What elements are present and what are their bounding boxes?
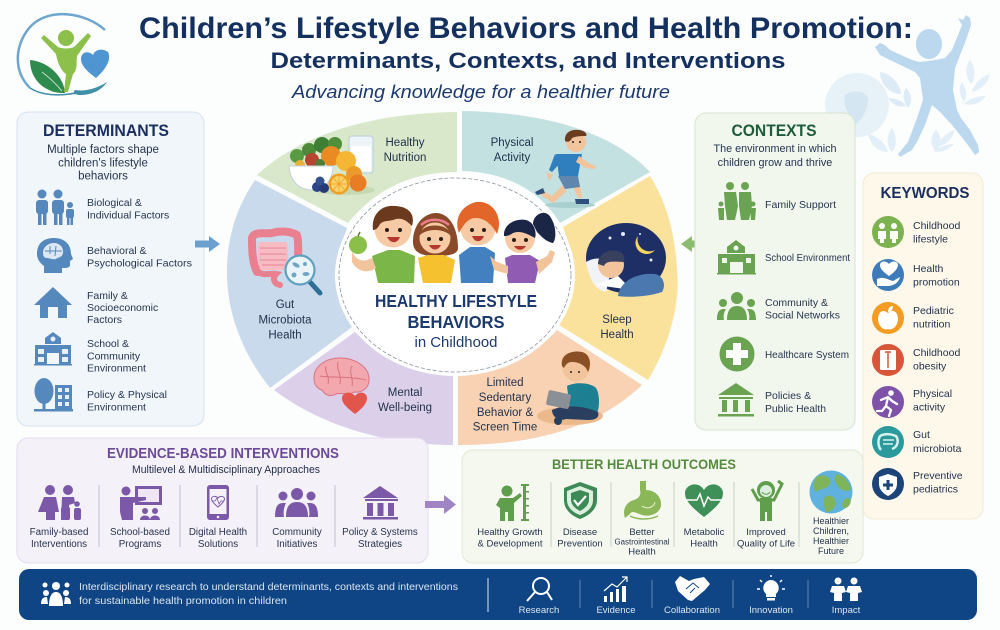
heading: contexts: CONTEXTS — [732, 122, 816, 140]
segment: mental well-being — [274, 332, 453, 445]
label: family-based interventions: Family-based — [30, 527, 88, 538]
keyword: physical activity — [872, 386, 952, 418]
label: gut microbiota health: Microbiota — [258, 314, 312, 326]
title: Children’s Lifestyle Behaviors and Health Promotion: — [139, 12, 913, 45]
keyword: physical activity: Physical — [913, 388, 952, 400]
illustration: boy with tablet — [537, 352, 603, 425]
label: healthier children, healthier future: Healthier — [813, 536, 849, 546]
icon: policy building — [363, 486, 398, 520]
icon: happy child — [752, 481, 782, 521]
text: community and social networks: Social Networks — [765, 310, 840, 322]
keyword: physical activity: activity — [913, 402, 946, 414]
label: policy and systems strategies: Policy & Systems — [342, 527, 418, 538]
label: healthier children, healthier future: Future — [818, 546, 844, 556]
label: limited sedentary behavior: Limited — [486, 377, 524, 389]
bottom banner — [19, 569, 977, 620]
label: family-based interventions: Interventions — [31, 539, 87, 550]
icon: family — [36, 190, 74, 225]
icon and label: collaboration: Collaboration — [664, 605, 720, 616]
icon: house — [34, 287, 72, 318]
icon and label: evidence — [596, 577, 636, 616]
arrow: interventions to outcomes — [425, 495, 456, 514]
label: limited sedentary behavior: Screen Time — [473, 422, 537, 434]
text: family support: Family Support — [765, 199, 836, 211]
illustration: food bowl and milk — [289, 136, 375, 195]
label: sleep health: Sleep — [602, 314, 632, 326]
center subheading: in Childhood — [414, 335, 498, 351]
icon: stomach — [624, 481, 661, 519]
icon and label: impact — [830, 578, 862, 616]
text: family: Socioeconomic — [87, 302, 158, 314]
icon: school — [717, 240, 756, 274]
icon: shield check — [564, 482, 597, 519]
label: limited sedentary behavior: Behavior & — [477, 407, 533, 419]
contexts intro: The environment in which — [713, 143, 837, 155]
icon: school — [34, 332, 72, 366]
keyword: gut microbiota: microbiota — [913, 443, 962, 455]
segment: physical activity — [462, 111, 650, 223]
heading: outcomes: BETTER HEALTH OUTCOMES — [552, 456, 736, 472]
icon: growth — [496, 484, 529, 521]
text: behavioral: Psychological Factors — [87, 258, 192, 270]
text: biological: Individual Factors — [87, 210, 169, 222]
text: school: Environment — [87, 362, 146, 374]
text: family: Family & — [87, 290, 128, 302]
banner text: Interdisciplinary research to understand determinants, contexts and interventions — [79, 581, 458, 593]
keyword: pediatric nutrition: Pediatric — [913, 305, 954, 317]
icon: community — [717, 292, 756, 320]
keyword: gut microbiota: Gut — [913, 429, 930, 441]
panel: better health outcomes — [462, 450, 863, 563]
keyword: pediatric nutrition — [872, 302, 954, 334]
label: physical activity: Activity — [494, 152, 530, 164]
label: sleep health: Health — [600, 329, 634, 341]
label: healthy growth: & Development — [478, 538, 543, 550]
illustration: sleeping child — [586, 223, 666, 297]
keyword: childhood obesity: obesity — [913, 360, 947, 372]
keyword: health promotion: Health — [913, 263, 944, 275]
icon: government building — [718, 383, 754, 416]
determinants intro: children's lifestyle — [58, 157, 148, 169]
icon: heart with pulse — [685, 484, 723, 517]
determinants intro: behaviors — [78, 171, 128, 183]
text: school: Community — [87, 350, 141, 362]
panel: keywords — [863, 173, 983, 519]
center heading: HEALTHY LIFESTYLE — [375, 291, 537, 311]
icon and label: impact: Impact — [832, 605, 861, 616]
label: limited sedentary behavior: Sedentary — [479, 392, 531, 404]
keyword: childhood lifestyle — [872, 216, 960, 248]
label: metabolic health: Health — [690, 538, 718, 550]
label: improved quality of life: Quality of Life — [737, 538, 795, 550]
subtitle: Determinants, Contexts, and Interventions — [270, 48, 786, 73]
label: gut microbiota health: Health — [268, 330, 302, 342]
determinants intro: Multiple factors shape — [47, 144, 159, 156]
label: healthy nutrition: Healthy — [386, 137, 425, 149]
interventions subheading: Multilevel & Multidisciplinary Approaches — [132, 464, 320, 476]
text: family: Factors — [87, 314, 122, 326]
icon: family-based — [38, 485, 81, 520]
segment: limited sedentary behavior and screen time — [458, 330, 642, 445]
segment: healthy nutrition — [257, 112, 457, 223]
label: gut microbiota health: Gut — [276, 299, 295, 311]
center heading line two: BEHAVIORS — [408, 312, 504, 332]
decorative child silhouette, globe and leaves — [825, 15, 990, 157]
label: better gastrointestinal health: Health — [628, 546, 656, 558]
label: community initiatives: Initiatives — [277, 539, 318, 550]
label: healthier children, healthier future: Children, — [813, 526, 849, 536]
label: disease prevention: Disease — [563, 527, 597, 538]
text: policy: Policy & Physical — [87, 389, 167, 401]
text: biological: Biological & — [87, 197, 142, 209]
label: better gastrointestinal health: Better — [629, 527, 655, 538]
panel: evidence-based interventions — [17, 438, 428, 563]
icon and label: innovation — [749, 575, 793, 616]
label: mental well-being: Mental — [388, 387, 422, 399]
panel: contexts — [695, 113, 855, 430]
icon and label: evidence: Evidence — [596, 605, 636, 616]
wheel of behaviors — [227, 111, 678, 445]
label: school-based programs: Programs — [119, 539, 161, 550]
keyword: preventive pediatrics — [872, 468, 963, 500]
icon: school-based — [120, 486, 162, 520]
arrow: determinants to wheel — [195, 236, 220, 252]
label: mental well-being: Well-being — [378, 402, 432, 414]
icon: globe — [810, 470, 852, 514]
illustration: intestine and magnifier — [252, 232, 320, 293]
arrow: contexts to wheel — [681, 236, 706, 252]
text: policies and public health: Public Health — [765, 403, 826, 415]
contexts intro: children grow and thrive — [718, 157, 832, 169]
icon: community — [275, 488, 318, 517]
icon: family — [718, 182, 756, 220]
segment: sleep health — [559, 176, 678, 380]
panel: determinants — [17, 112, 204, 426]
keyword: preventive pediatrics: Preventive — [913, 470, 963, 482]
icon: digital health — [207, 485, 229, 520]
banner text: for sustainable health promotion in children — [79, 595, 287, 607]
text: school environment: School Environment — [765, 252, 850, 264]
heading: determinants: DETERMINANTS — [43, 122, 169, 140]
heading: interventions: EVIDENCE-BASED INTERVENTIONS — [107, 446, 339, 462]
heading: keywords: KEYWORDS — [880, 185, 970, 202]
keyword: pediatric nutrition: nutrition — [913, 318, 951, 330]
label: digital health solutions: Digital Health — [189, 527, 247, 538]
icon and label: research: Research — [519, 605, 559, 616]
keyword: childhood obesity — [872, 344, 960, 376]
label: policy and systems strategies: Strategies — [358, 539, 402, 550]
text: community and social networks: Community & — [765, 297, 828, 309]
icon: head with brain — [37, 238, 73, 273]
keyword: health promotion: promotion — [913, 276, 960, 288]
keyword: childhood lifestyle: Childhood — [913, 220, 960, 232]
illustration: running boy — [535, 130, 596, 208]
label: healthier children, healthier future: Healthier — [813, 516, 849, 526]
icon: research team — [41, 582, 71, 606]
text: policies and public health: Policies & — [765, 390, 811, 402]
logo — [18, 14, 109, 95]
text: behavioral: Behavioral & — [87, 245, 147, 257]
text: policy: Environment — [87, 402, 146, 414]
label: physical activity: Physical — [491, 137, 533, 149]
icon and label: innovation: Innovation — [749, 605, 793, 616]
icon: tree and building — [34, 378, 73, 412]
keyword: childhood lifestyle: lifestyle — [913, 233, 948, 245]
label: community initiatives: Community — [272, 527, 322, 538]
label: better gastrointestinal health: Gastrointestinal — [614, 538, 670, 546]
segment: gut microbiota health — [227, 180, 352, 388]
center circle — [335, 174, 575, 376]
illustration: four children — [349, 202, 555, 283]
keyword: childhood obesity: Childhood — [913, 347, 960, 359]
keyword: preventive pediatrics: pediatrics — [913, 483, 958, 495]
label: healthy nutrition: Nutrition — [384, 152, 426, 164]
icon and label: research — [519, 578, 559, 616]
label: disease prevention: Prevention — [557, 538, 603, 550]
keyword: health promotion — [872, 259, 960, 291]
icon and label: collaboration — [664, 576, 720, 616]
label: digital health solutions: Solutions — [198, 539, 238, 550]
tagline: Advancing knowledge for a healthier future — [291, 82, 670, 102]
illustration: brain and heart — [314, 358, 369, 414]
label: healthy growth: Healthy Growth — [477, 527, 543, 538]
icon: healthcare cross — [720, 336, 754, 372]
text: school: School & — [87, 338, 129, 350]
text: healthcare system: Healthcare System — [765, 349, 849, 361]
label: improved quality of life: Improved — [746, 527, 786, 538]
label: school-based programs: School-based — [110, 527, 170, 538]
label: metabolic health: Metabolic — [684, 527, 725, 538]
keyword: gut microbiota — [872, 426, 962, 458]
